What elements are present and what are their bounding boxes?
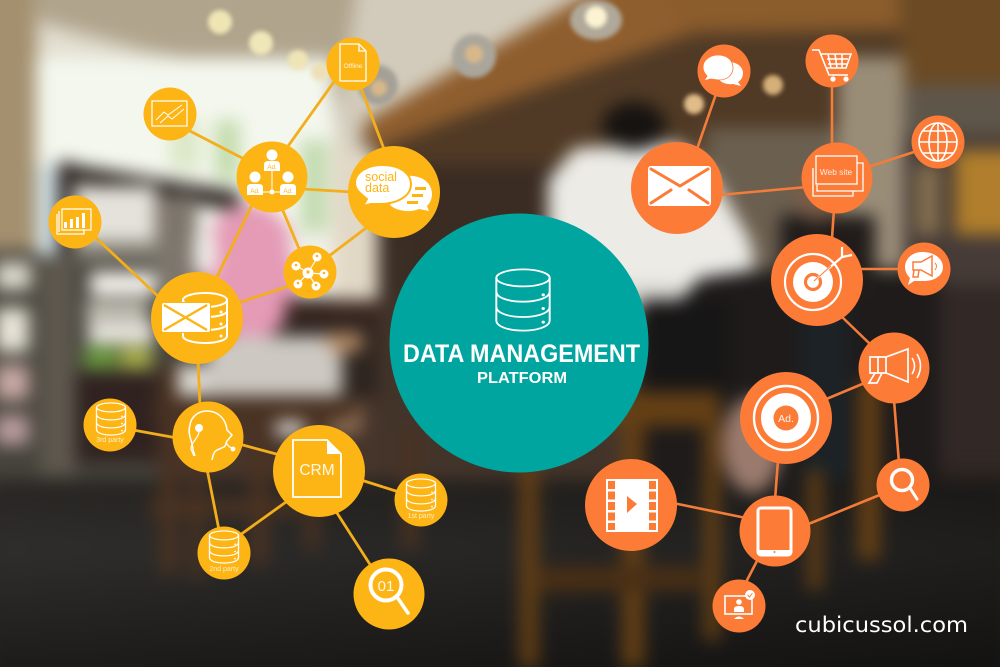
- node: web site pages: Web site: [820, 167, 853, 177]
- node: 1st party database: 1st party: [408, 513, 435, 520]
- node: chat bubbles: [698, 44, 750, 98]
- node: web site pages: [802, 142, 872, 214]
- node: ad bullseye: Ad.: [778, 413, 794, 425]
- node: ad bullseye: [740, 372, 832, 464]
- node: 3rd party database: 3rd party: [96, 437, 124, 444]
- hub subtitle: PLATFORM: [477, 370, 567, 387]
- node: offline document: [326, 38, 380, 90]
- node: ad people network: Ad.: [267, 164, 277, 171]
- node: globe: [912, 116, 964, 168]
- node: people network: [284, 246, 336, 298]
- node: social data speech bubbles: social: [365, 170, 397, 184]
- node: social data speech bubbles: data: [365, 181, 389, 195]
- node: CRM document: [273, 425, 365, 517]
- node: envelope: [631, 142, 723, 234]
- node: CRM document: CRM: [299, 462, 335, 479]
- node: 2nd party database: [198, 526, 250, 580]
- node: ad people network: [236, 142, 308, 212]
- connector lines: yellow network: [94, 79, 399, 566]
- node: call agent headset: [172, 402, 244, 472]
- node: ad people network: Ad.: [283, 188, 293, 195]
- node: 2nd party database: 2nd party: [209, 566, 239, 573]
- node: bar chart reports: [48, 196, 102, 248]
- node: video film strip: [585, 459, 677, 551]
- node: social data speech bubbles: [348, 146, 440, 238]
- node: offline document: Offline: [344, 63, 363, 70]
- node: ad people network: Ad.: [250, 188, 260, 195]
- node: magnifier: [876, 458, 930, 512]
- node: tablet: [740, 496, 810, 566]
- node: 1st party database: [394, 474, 448, 526]
- website watermark: cubicussol.com: [795, 613, 968, 637]
- node: binary search magnifier: 01: [378, 578, 394, 595]
- node: line chart: [144, 88, 196, 140]
- hub title: DATA MANAGEMENT: [403, 340, 640, 368]
- node: binary search magnifier: [354, 558, 424, 630]
- node: shopping cart: [806, 34, 858, 88]
- node: 3rd party database: [84, 398, 136, 452]
- node: mail and database: [151, 272, 243, 364]
- connector lines: orange network: [673, 83, 917, 584]
- node: megaphone speech bubble: [898, 242, 950, 296]
- node: target with arrow: [771, 234, 863, 326]
- node: monitor with person: [712, 580, 766, 632]
- icon: database: [496, 269, 550, 331]
- central hub: Data Management Platform: [390, 214, 648, 472]
- node: megaphone: [858, 332, 930, 404]
